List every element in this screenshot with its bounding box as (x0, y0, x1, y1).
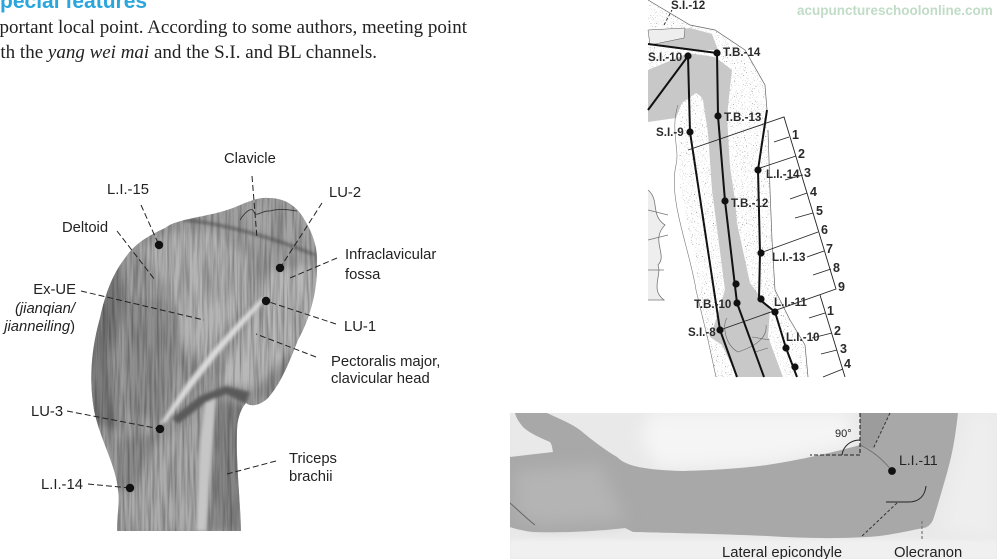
photo labels (722, 452, 962, 559)
labels: anatomy: LU-1 (344, 319, 376, 335)
point labels: T.B.-10 (694, 298, 731, 311)
leader lines (861, 413, 922, 541)
ruler numbers: 1 (827, 304, 834, 318)
labels: anatomy: LU-2 (329, 185, 361, 201)
labels: anatomy: Ex-UE (33, 282, 76, 298)
ruler numbers (792, 128, 851, 371)
finger gap (510, 503, 535, 525)
labels: anatomy: fossa (345, 267, 381, 283)
labels: anatomy: clavicular head (331, 371, 430, 387)
labels: anatomy: brachii (289, 469, 333, 485)
ruler numbers: 4 (844, 357, 851, 371)
acupuncture points: anatomy (126, 241, 284, 492)
photo: forearm bent at elbow (510, 413, 997, 559)
signature (240, 209, 297, 220)
acupuncture points (684, 49, 799, 371)
point labels: L.I.-10 (786, 331, 820, 344)
labels: anatomy: jianneiling) (2, 319, 75, 335)
point labels: L.I.-13 (772, 251, 806, 264)
labels: anatomy: (jianqian/ (15, 301, 77, 317)
point labels: S.I.-8 (688, 326, 716, 339)
watermark: acupunctureschoolonline.com (797, 3, 993, 18)
point labels: T.B.-13 (724, 111, 762, 124)
point labels: T.B.-14 (723, 46, 761, 59)
fold highlight (160, 297, 264, 424)
point labels: L.I.-11 (774, 296, 807, 309)
ribs (648, 190, 668, 300)
muscle shading (85, 195, 320, 531)
hand highlight (519, 470, 614, 520)
anatomical illustration: shoulder and upper arm (85, 190, 325, 535)
cloth background (647, 416, 846, 463)
90 degree guide: 90° (835, 428, 852, 440)
photo labels: L.I.-11 (899, 452, 938, 468)
ruler numbers: 1 (792, 128, 799, 142)
labels: anatomy: Deltoid (62, 220, 108, 236)
lateral epicondyle curve (886, 486, 926, 502)
labels: anatomy: L.I.-14 (41, 477, 83, 493)
ruler numbers: 8 (833, 261, 840, 275)
point labels: T.B.-12 (731, 197, 768, 210)
point L.I.-11 (888, 467, 896, 475)
ruler numbers: 4 (810, 185, 817, 199)
point labels: S.I.-10 (648, 51, 682, 64)
scapula bone (648, 54, 706, 122)
ruler numbers: 3 (804, 166, 811, 180)
labels: anatomy: Triceps (289, 451, 337, 467)
arm silhouette (91, 198, 317, 531)
skeletal arm diagram (648, 0, 851, 377)
ruler numbers: 2 (798, 147, 805, 161)
forearm and hand (510, 413, 958, 538)
labels: anatomy: Pectoralis major, (331, 354, 440, 370)
leader lines: anatomy (67, 176, 337, 488)
labels: anatomy: Clavicle (224, 151, 276, 167)
labels: anatomy: L.I.-15 (107, 182, 149, 198)
ruler numbers: 9 (838, 280, 845, 294)
point labels (648, 0, 820, 344)
text block: point description (0, 17, 468, 63)
ruler numbers: 5 (816, 204, 823, 218)
ruler numbers: 6 (821, 223, 828, 237)
skin outline (648, 0, 808, 377)
point labels: S.I.-9 (656, 126, 684, 139)
stippled skin (648, 0, 813, 377)
ruler numbers: 7 (826, 242, 833, 256)
labels: anatomy (2, 151, 440, 493)
muscle fibres: arm and deltoid (85, 190, 325, 535)
elbow crease (860, 444, 890, 468)
elbow joint detail (725, 318, 770, 352)
channel lines (648, 44, 797, 377)
labels: anatomy: Infraclavicular (345, 247, 436, 263)
fold shadow (172, 386, 250, 424)
measuring ruler (664, 10, 845, 377)
90 degree guide (810, 413, 860, 455)
labels: anatomy: LU-3 (31, 404, 63, 420)
ruler numbers: 2 (834, 324, 841, 338)
humerus and forearm bones (682, 53, 783, 377)
point labels: L.I.-14 (766, 168, 800, 181)
ruler numbers: 3 (840, 342, 847, 356)
clavicle ridge (183, 220, 315, 255)
